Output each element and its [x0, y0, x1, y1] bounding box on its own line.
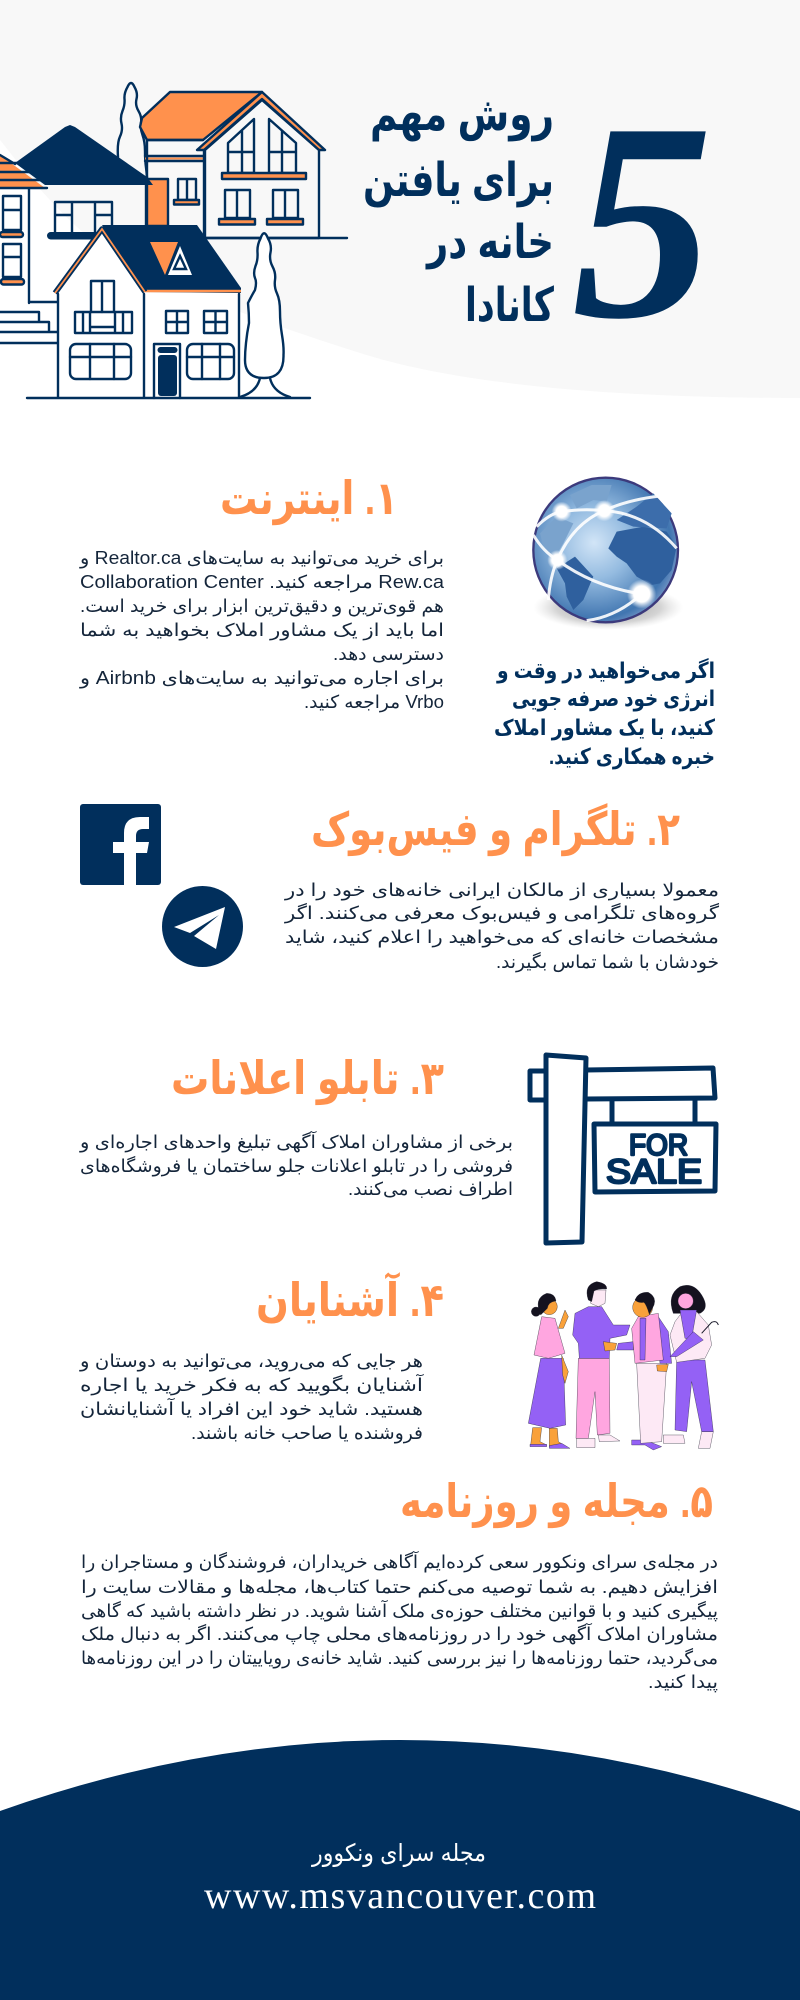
section 5 text: مشاوران املاک آگهی خود را در روزنامه‌های محلی چاپ می‌کنند. اگر به دنبال ملک — [81, 1622, 718, 1645]
title — [363, 87, 554, 331]
section 3 text: اطراف نصب می‌کنند. — [348, 1179, 513, 1200]
far left house — [0, 155, 58, 343]
section 1 text: Vrbo مراجعه کنید. — [304, 692, 444, 713]
header background shape — [0, 0, 800, 398]
section 4 text: آشنایان بگویید که به فکر خرید یا اجاره — [80, 1373, 424, 1396]
navy roof house — [15, 125, 153, 240]
section 1 text: Rew.ca مراجعه کنید. Collaboration Center — [80, 572, 445, 593]
man in purple sweater — [573, 1282, 630, 1448]
section 5 heading: ۵. مجله و روزنامه — [400, 1475, 713, 1528]
icon: telegram — [162, 886, 243, 967]
section 2 text — [284, 880, 720, 973]
title: خانه در — [425, 215, 554, 269]
section 5 text — [81, 1550, 718, 1693]
section 1 text: هم قوی‌ترین و دقیق‌ترین ابزار برای خرید است. — [80, 596, 444, 617]
callout: خبره همکاری کنید. — [549, 744, 715, 770]
back tree — [118, 83, 148, 223]
globe shadow — [533, 585, 683, 630]
section 4 text: هر جایی که می‌روید، می‌توانید به دوستان و — [79, 1351, 423, 1372]
section 2 text: معمولا بسیاری از مالکان ایرانی خانه‌های خود را در — [284, 880, 719, 901]
sign wording — [606, 1129, 702, 1191]
woman with umbrella — [663, 1285, 718, 1448]
back house — [140, 92, 347, 238]
section 4 heading: ۴. آشنایان — [256, 1272, 444, 1326]
section 3 heading: ۳. تابلو اعلانات — [171, 1052, 444, 1105]
footer website: www.msvancouver.com — [204, 1875, 596, 1917]
front house — [27, 225, 310, 398]
section 1 text — [79, 548, 445, 713]
callout: اگر می‌خواهید در وقت و — [496, 657, 715, 684]
big number 5: 5 — [572, 65, 713, 377]
section 4 text: هستید. شاید خود این افراد یا آشنایانشان — [80, 1397, 423, 1420]
footer — [0, 1740, 800, 2000]
front tree — [240, 233, 290, 397]
illustration: row of houses — [0, 83, 347, 398]
man in pink vest — [617, 1292, 672, 1450]
section 5 text: پیگیری کنید و با قوانین مختلف حوزه‌ی ملک آشنا شوید. در نظر داشته باشید که گاهی — [81, 1599, 718, 1622]
callout: انرژی خود صرفه جویی — [512, 686, 715, 712]
section 1 heading: ۱. اینترنت — [220, 472, 398, 525]
section 1 text: دسترسی دهد. — [333, 644, 444, 665]
callout: کنید، با یک مشاور املاک — [494, 715, 715, 741]
section 2 text: خودشان با شما تماس بگیرند. — [496, 951, 719, 973]
section 1 text: برای خرید می‌توانید به سایت‌های Realtor.ca و — [79, 548, 444, 569]
icon: facebook — [80, 804, 161, 885]
section 3 text: فروشی را در تابلو اعلانات جلو ساختمان یا فروشگاه‌های — [80, 1155, 513, 1177]
footer magazine name: مجله سرای ونکوور — [311, 1840, 486, 1867]
section 5 text: می‌گردید، حتما روزنامه‌ها را نیز بررسی کنید. شاید خانه‌ی رویاییتان را در این روزنامه‌ها — [81, 1647, 718, 1669]
title: کانادا — [465, 278, 554, 331]
section 5 text: پیدا کنید. — [648, 1672, 718, 1693]
section 5 text: افزایش دهیم. به شما توصیه می‌کنم حتما کتاب‌ها، مجله‌ها و مقالات سایت را — [81, 1577, 718, 1598]
icon: for sale sign — [530, 1055, 716, 1243]
woman with skirt — [528, 1293, 570, 1448]
sign wording: SALE — [606, 1153, 702, 1191]
title: برای یافتن — [363, 153, 554, 208]
section 3 text — [79, 1130, 513, 1200]
title: روش مهم — [370, 87, 554, 142]
sign wording: FOR — [629, 1129, 688, 1162]
section 4 text — [79, 1351, 424, 1444]
section 4 text: فروشنده یا صاحب خانه باشند. — [191, 1423, 423, 1444]
section 2 text: مشخصات خانه‌ای که می‌خواهید را اعلام کنید، شاید — [285, 927, 719, 948]
section 1 text: برای اجاره می‌توانید به سایت‌های Airbnb و — [79, 668, 444, 689]
section 2 text: گروه‌های تلگرامی و فیس‌بوک معرفی می‌کنند. اگر — [284, 902, 720, 924]
illustration: group of people — [528, 1282, 718, 1450]
section 1 text: اما باید از یک مشاور املاک بخواهید به شما — [80, 620, 444, 641]
section 3 text: برخی از مشاوران املاک آگهی تبلیغ واحدهای اجاره‌ای و — [79, 1130, 513, 1153]
section 5 text: در مجله‌ی سرای ونکوور سعی کرده‌ایم آگاهی خریداران، فروشندگان و مستاجران را — [81, 1550, 718, 1573]
icon: globe — [533, 478, 683, 630]
callout — [494, 657, 715, 770]
section 2 heading: ۲. تلگرام و فیس‌بوک — [311, 803, 680, 856]
